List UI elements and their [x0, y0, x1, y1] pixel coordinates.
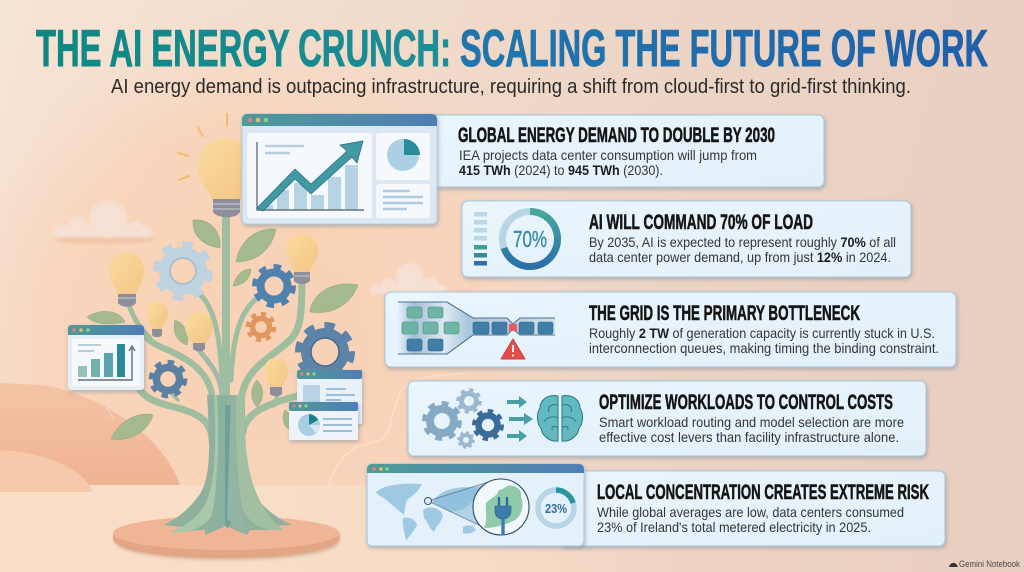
leaves [87, 220, 358, 440]
card 5 [560, 471, 945, 546]
small bulb left [109, 252, 144, 307]
card 1 body line 2: 415 TWh (2024) to 945 TWh (2030). [459, 162, 663, 178]
gear blue [255, 267, 293, 305]
backdrop hills and floor [0, 373, 1024, 572]
gear orange [248, 314, 274, 340]
magnifier beam [428, 480, 495, 528]
arrows [507, 396, 533, 442]
card 3 [385, 292, 956, 367]
icon: bottleneck funnel [398, 302, 555, 359]
title [36, 20, 988, 78]
card 4 body line 2: effective cost levers than facility infrastructure alone. [599, 429, 899, 445]
card 1 [420, 115, 824, 187]
card 1 heading: GLOBAL ENERGY DEMAND TO DOUBLE BY 2030 [458, 124, 775, 147]
small bulb right [286, 233, 318, 284]
cloud left [53, 200, 155, 244]
small bulb 2 [146, 301, 168, 337]
gear dark [299, 326, 351, 378]
browser window: growth chart [242, 114, 437, 224]
card 2 body: By 2035, AI is expected to represent roughly 70% of all [589, 234, 896, 250]
tree illustration [68, 114, 362, 558]
card 5 body line 2: 23% of Ireland's total metered electricity in 2025. [597, 519, 871, 535]
small bulb 3 [185, 312, 213, 351]
small bulb lower right [264, 358, 288, 396]
donut: 70 percent: 70% [513, 226, 547, 252]
large bulb [198, 138, 254, 217]
icon: brain [537, 396, 583, 441]
trunk [163, 395, 292, 535]
card 4 [408, 381, 926, 456]
world map [376, 484, 483, 541]
card 2 body line 2: data center power demand, up from just 12% in 2024. [589, 249, 891, 265]
lightbulb rays [178, 114, 227, 180]
base disc [113, 516, 339, 558]
card 3 heading: THE GRID IS THE PRIMARY BOTTLENECK [589, 302, 860, 325]
donut: 70 percent [502, 212, 558, 266]
icon: gears [424, 390, 502, 448]
card 2 [462, 201, 911, 277]
card 3 body line 2: interconnection queues, making timing the binding constraint. [589, 340, 939, 356]
subtitle: AI energy demand is outpacing infrastructure, requiring a shift from cloud-first to grid-first thinking. [111, 75, 911, 98]
card 3 body: Roughly 2 TW of generation capacity is currently stuck in U.S. [589, 325, 935, 341]
gear light [157, 245, 209, 297]
branches [127, 219, 302, 440]
browser window: world map [367, 464, 584, 546]
card 2 heading: AI WILL COMMAND 70% OF LOAD [589, 211, 813, 234]
magnifier circle with Ireland and plug [473, 479, 529, 535]
small window: bar chart [68, 325, 144, 390]
card 4 body: Smart workload routing and model selection are more [599, 414, 904, 430]
window stack [289, 370, 362, 440]
icon: level bars [474, 212, 487, 266]
donut: 23 percent [538, 490, 574, 526]
donut: 23 percent: 23% [545, 501, 567, 516]
card 1 body: IEA projects data center consumption will jump from [459, 147, 757, 163]
title: THE AI ENERGY CRUNCH: [36, 20, 451, 78]
gear lower left [152, 362, 184, 396]
cloud right [370, 263, 447, 294]
card 5 body: While global averages are low, data centers consumed [597, 504, 904, 520]
